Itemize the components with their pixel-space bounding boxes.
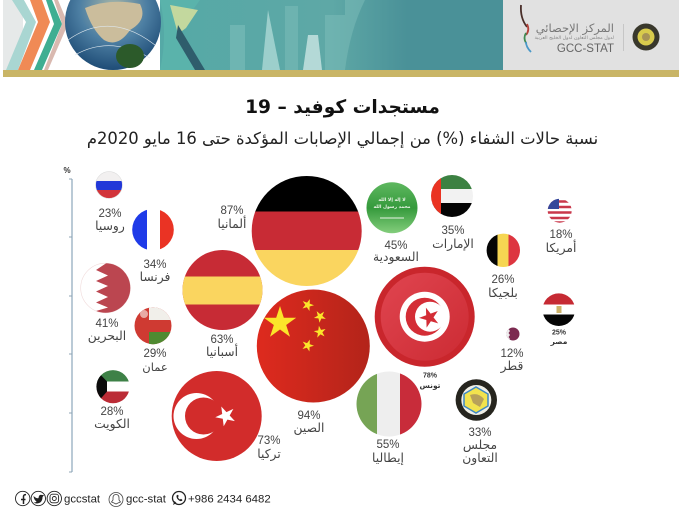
header banner	[0, 0, 680, 77]
bubble: Tunisia 78%: تونس	[420, 381, 441, 390]
banner artwork	[3, 0, 503, 70]
bubble: Belgium 26%: بلجيكا	[488, 286, 518, 300]
handle: gcc-stat: gcc-stat	[126, 494, 167, 506]
logo panel: GCC-STAT	[557, 43, 614, 55]
icon: twitter	[31, 491, 46, 506]
bubble: Italy 55%	[355, 370, 423, 465]
bubble: GCC 33%	[456, 379, 498, 466]
bubble: UAE 35%: الإمارات	[432, 237, 474, 252]
icon: instagram	[47, 491, 62, 506]
bubble: UAE 35%	[430, 175, 474, 252]
bubble: Russia 23%	[95, 171, 125, 234]
bubble: Saudi Arabia 45%	[366, 182, 419, 265]
bubble: Spain 63%	[181, 249, 265, 359]
bubble: Egypt 25%: 25%	[552, 330, 567, 336]
bubble: Belgium 26%: 26%	[491, 274, 515, 286]
bubble: Oman 29%: 29%	[143, 348, 167, 360]
bubble: Germany 87%: 87%	[220, 205, 244, 217]
bubble: UAE 35%: 35%	[441, 225, 465, 237]
bubble: France 34%: فرنسا	[140, 270, 170, 285]
footer contacts	[16, 491, 271, 506]
bubble: Russia 23%: 23%	[98, 208, 122, 220]
bubble: Spain 63%: 63%	[210, 334, 234, 346]
bubble: China 94%	[257, 290, 370, 436]
logo panel: لدول مجلس التعاون لدول الخليج العربية	[534, 35, 615, 41]
bubble: Tunisia 78%: 78%	[423, 372, 438, 380]
handle: gccstat: gccstat	[64, 494, 101, 506]
bubble: Qatar 12%	[500, 327, 524, 374]
bubble: Saudi Arabia 45%: لا إله إلا الله	[378, 198, 406, 203]
bubble: Turkey 73%: 73%	[257, 435, 281, 447]
bubble: Egypt 25%: مصر	[550, 337, 568, 346]
bubble: USA 18%	[546, 198, 576, 256]
bubble: Italy 55%: 55%	[376, 439, 400, 451]
bubble: Kuwait 28%	[94, 370, 130, 432]
bubble: USA 18%: 18%	[549, 229, 573, 241]
bubble: Oman 29%: عمان	[142, 360, 168, 374]
bubble: GCC 33%: مجلس	[463, 438, 497, 453]
subtitle: نسبة حالات الشفاء (%) من إجمالي الإصابات المؤكدة حتى 16 مايو 2020م	[87, 129, 598, 149]
bubble: Egypt 25%	[542, 293, 576, 346]
bubble: Spain 63%: أسبانيا	[206, 344, 238, 359]
icon: facebook	[16, 491, 30, 506]
bubble: Belgium 26%	[486, 233, 520, 300]
bubble: France 34%: 34%	[143, 259, 167, 271]
icon: whatsapp	[172, 492, 186, 505]
bubble: Bahrain 41%: 41%	[95, 318, 119, 330]
bubble: GCC 33%: 33%	[468, 427, 492, 439]
bubble: Bahrain 41%	[81, 262, 132, 344]
bubble: China 94%: 94%	[297, 410, 321, 422]
axis	[63, 166, 72, 472]
bubble: Saudi Arabia 45%: السعودية	[373, 250, 419, 265]
bubble: Bahrain 41%: البحرين	[88, 329, 126, 344]
bubble: Tunisia 78%	[375, 267, 475, 390]
logo panel: المركز الإحصائي	[536, 21, 614, 36]
icon: snapchat	[109, 492, 123, 506]
bubble: Qatar 12%: 12%	[500, 348, 524, 360]
bubble: France 34%	[132, 208, 175, 285]
bubble: Kuwait 28%: الكويت	[94, 417, 130, 432]
bubble: Saudi Arabia 45%: 45%	[384, 240, 408, 252]
bubble: Germany 87%: ألمانيا	[218, 216, 246, 231]
title: مستجدات كوفيد – 19	[245, 97, 440, 118]
bubble: USA 18%: أمريكا	[546, 240, 576, 256]
bubble: Turkey 73%	[172, 371, 281, 462]
bubble: China 94%: الصين	[294, 421, 324, 436]
bubble: Germany 87%	[218, 175, 364, 287]
bubble: Oman 29%	[134, 307, 172, 374]
bubble: Kuwait 28%: 28%	[100, 406, 124, 418]
phone number: +986 2434 6482	[188, 494, 271, 506]
bubble: Turkey 73%: تركيا	[257, 447, 281, 462]
logo panel	[503, 0, 679, 70]
gold band	[3, 70, 679, 77]
bubble: Qatar 12%: قطر	[500, 359, 523, 374]
axis: %	[63, 166, 71, 175]
bubble: GCC 33%: التعاون	[462, 451, 498, 466]
bubble: Russia 23%: روسيا	[95, 219, 125, 234]
bubble: Saudi Arabia 45%: محمد رسول الله	[373, 205, 411, 210]
bubble: Italy 55%: إيطاليا	[372, 451, 404, 465]
